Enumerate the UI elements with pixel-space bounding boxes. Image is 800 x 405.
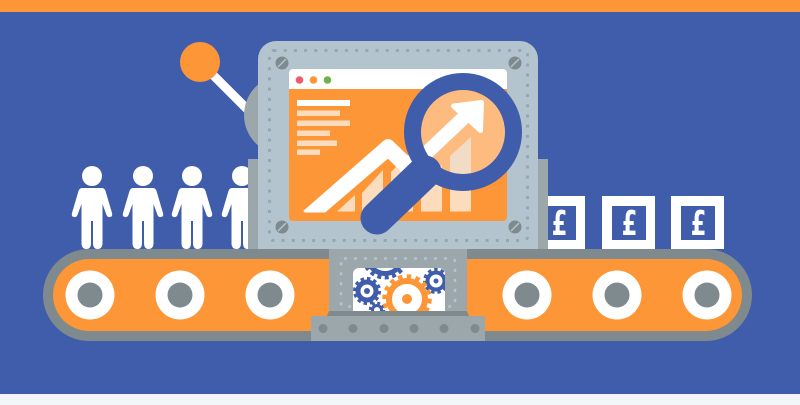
pound money boxes: £ [552,203,567,243]
lower gear housing [329,249,467,311]
gear window [353,268,445,311]
lens [413,82,513,182]
rising arrow line [304,140,416,212]
pound money boxes [530,196,724,249]
browser screen [289,69,507,221]
panel rivet dots [270,50,528,240]
handle [377,172,425,218]
bottom pale strip [0,394,800,405]
window buttons [296,76,331,84]
machine main panel [258,41,538,249]
conveyor belt [43,249,752,341]
pound money boxes: £ [691,203,706,243]
people on the belt [72,166,262,249]
top orange bar [0,0,800,12]
lever hub [244,75,324,155]
magnifying glass [377,82,514,218]
gears [353,268,445,311]
conveyor rollers [66,270,732,320]
screws [276,56,522,234]
bar chart [337,137,471,212]
text lines [297,100,350,155]
ring [412,82,514,182]
machine base plate [311,311,485,341]
pound money boxes: £ [622,203,637,243]
machine side pillars [248,159,548,249]
lever with orange knob [180,42,256,118]
